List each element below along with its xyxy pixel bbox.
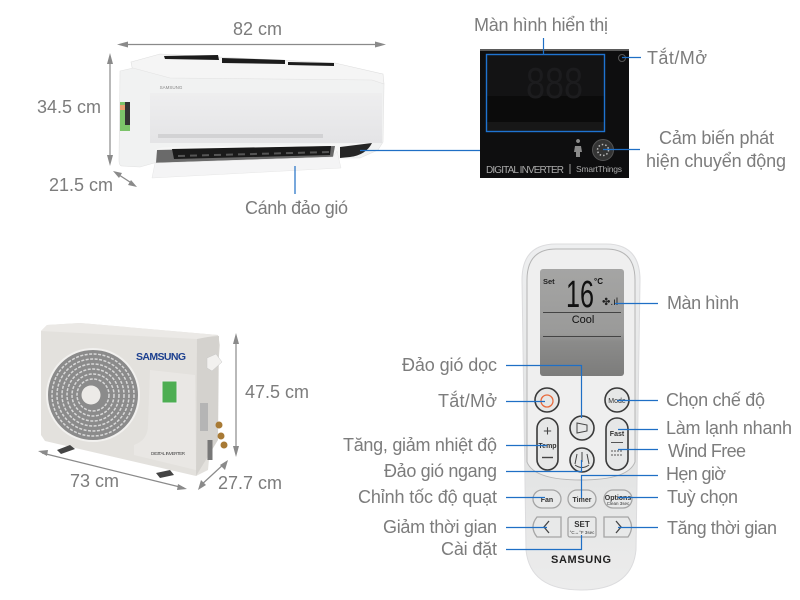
LCD set text: Set <box>543 277 555 286</box>
digits: 888 <box>526 59 583 108</box>
button: horizontal swing <box>570 448 594 472</box>
button: options: Clean 3sec <box>607 501 630 506</box>
label: screen: Màn hình <box>667 293 739 313</box>
label: decrease time: Giảm thời gian <box>383 517 497 537</box>
label: vertical swing: Đảo gió dọc <box>402 355 497 375</box>
leader: wind blade <box>294 166 296 194</box>
button: timer <box>568 490 596 508</box>
indoor unit illustration <box>119 54 384 178</box>
remote body <box>522 244 640 590</box>
top vent cover <box>131 54 384 84</box>
power icon <box>618 54 626 62</box>
dimension arrow: width 82 cm <box>117 42 386 48</box>
lighter top edge <box>41 323 218 339</box>
leader lines: remote right side <box>582 304 658 528</box>
label: 47.5 cm: 47.5 cm <box>245 382 309 402</box>
dimension arrow: outdoor width <box>38 450 187 490</box>
button: set <box>568 517 596 537</box>
label: fan speed: Chỉnh tốc độ quạt <box>358 487 497 507</box>
button: options: Options <box>605 495 631 502</box>
label: settings: Cài đặt <box>441 539 497 559</box>
button: temp: Temp <box>538 443 557 450</box>
button: set: °C↔°F 3sec <box>570 530 595 535</box>
button: mode <box>605 388 629 412</box>
energy label <box>162 381 177 403</box>
label: 21.5 cm: 21.5 cm <box>49 175 113 195</box>
label: timer: Hẹn giờ <box>666 464 726 484</box>
label: sensor line 2: hiện chuyển động <box>646 151 786 171</box>
brand: SAMSUNG <box>136 351 186 363</box>
LCD screen <box>540 269 624 376</box>
energy label <box>120 102 130 131</box>
brand: SAMSUNG <box>160 85 183 90</box>
fan grille <box>47 349 139 441</box>
button: fan <box>533 490 561 508</box>
label: 73 cm: 73 cm <box>70 471 119 491</box>
feet <box>57 445 174 478</box>
inner face <box>527 249 635 480</box>
leader: power <box>622 56 641 58</box>
label: wind free: Wind Free <box>668 441 746 461</box>
side label <box>200 403 208 431</box>
inverter mark: DIGITAL INVERTER <box>151 451 186 456</box>
button: mode: Mode <box>608 398 626 405</box>
label: 34.5 cm: 34.5 cm <box>37 97 101 117</box>
brand SmartThings text: SmartThings <box>576 164 622 174</box>
motion sensor <box>592 140 614 160</box>
label: sensor line 1: Cảm biến phát <box>659 128 774 148</box>
unit body <box>119 68 384 167</box>
side pipes <box>210 422 228 460</box>
remote labels: left <box>343 355 497 559</box>
remote labels: right <box>666 293 792 538</box>
button: set: SET <box>574 520 590 529</box>
label: horizontal swing: Đảo gió ngang <box>384 461 497 481</box>
dimension arrow: outdoor depth <box>198 460 228 490</box>
label: display: Màn hình hiển thị <box>474 15 608 35</box>
button: temp: + <box>543 423 552 440</box>
dimension arrow: height 34.5 cm <box>107 53 113 166</box>
front grille <box>150 93 382 143</box>
label: 27.7 cm: 27.7 cm <box>218 473 282 493</box>
label: temperature: Tăng, giảm nhiệt độ <box>343 435 497 455</box>
button: fan: Fan <box>541 497 553 504</box>
button: options <box>604 490 632 508</box>
side cap <box>207 354 222 371</box>
label: 82 cm: 82 cm <box>233 19 282 39</box>
brand inverter text: DIGITAL INVERTER <box>486 165 564 176</box>
air outlet <box>155 143 372 162</box>
wind blade <box>152 151 341 178</box>
label: power: Tắt/Mở <box>438 390 497 411</box>
casing <box>41 323 220 476</box>
LCD degree: °C <box>594 277 603 286</box>
display panel <box>480 49 629 178</box>
leader: display <box>542 38 544 55</box>
button: left <box>533 517 561 537</box>
label: increase time: Tăng thời gian <box>667 518 777 538</box>
dim reflection <box>486 54 605 96</box>
LCD mode: Cool <box>572 314 594 326</box>
outdoor unit illustration <box>41 323 228 478</box>
front panel <box>134 370 196 470</box>
leader: display panel link <box>360 150 481 152</box>
remote control <box>522 244 640 590</box>
LCD fan icon: ✤.ıl <box>602 297 618 308</box>
display frame <box>486 54 604 132</box>
button: temp <box>537 418 558 470</box>
person icon <box>574 139 582 157</box>
leader: sensor <box>603 148 640 150</box>
label: fast cooling: Làm lạnh nhanh <box>666 418 792 438</box>
label: power: Tắt/Mở <box>647 47 707 68</box>
dimension arrow: outdoor height <box>233 333 239 457</box>
LCD temperature: 16 <box>566 274 594 316</box>
button: timer: Timer <box>573 497 592 504</box>
button: power <box>535 388 559 412</box>
remote brand: SAMSUNG <box>551 554 611 566</box>
button: vertical swing <box>570 416 594 440</box>
dimension arrow: depth 21.5 cm <box>113 171 137 187</box>
label: options: Tuỳ chọn <box>667 487 738 507</box>
button: fast and wind free <box>606 418 628 470</box>
label: mode select: Chọn chế độ <box>666 390 765 410</box>
button: right <box>604 517 632 537</box>
label: wind blade: Cánh đảo gió <box>245 198 348 218</box>
leader lines: remote left side <box>506 366 582 550</box>
button: fast and wind free: Fast <box>610 431 625 438</box>
side face <box>196 336 219 476</box>
